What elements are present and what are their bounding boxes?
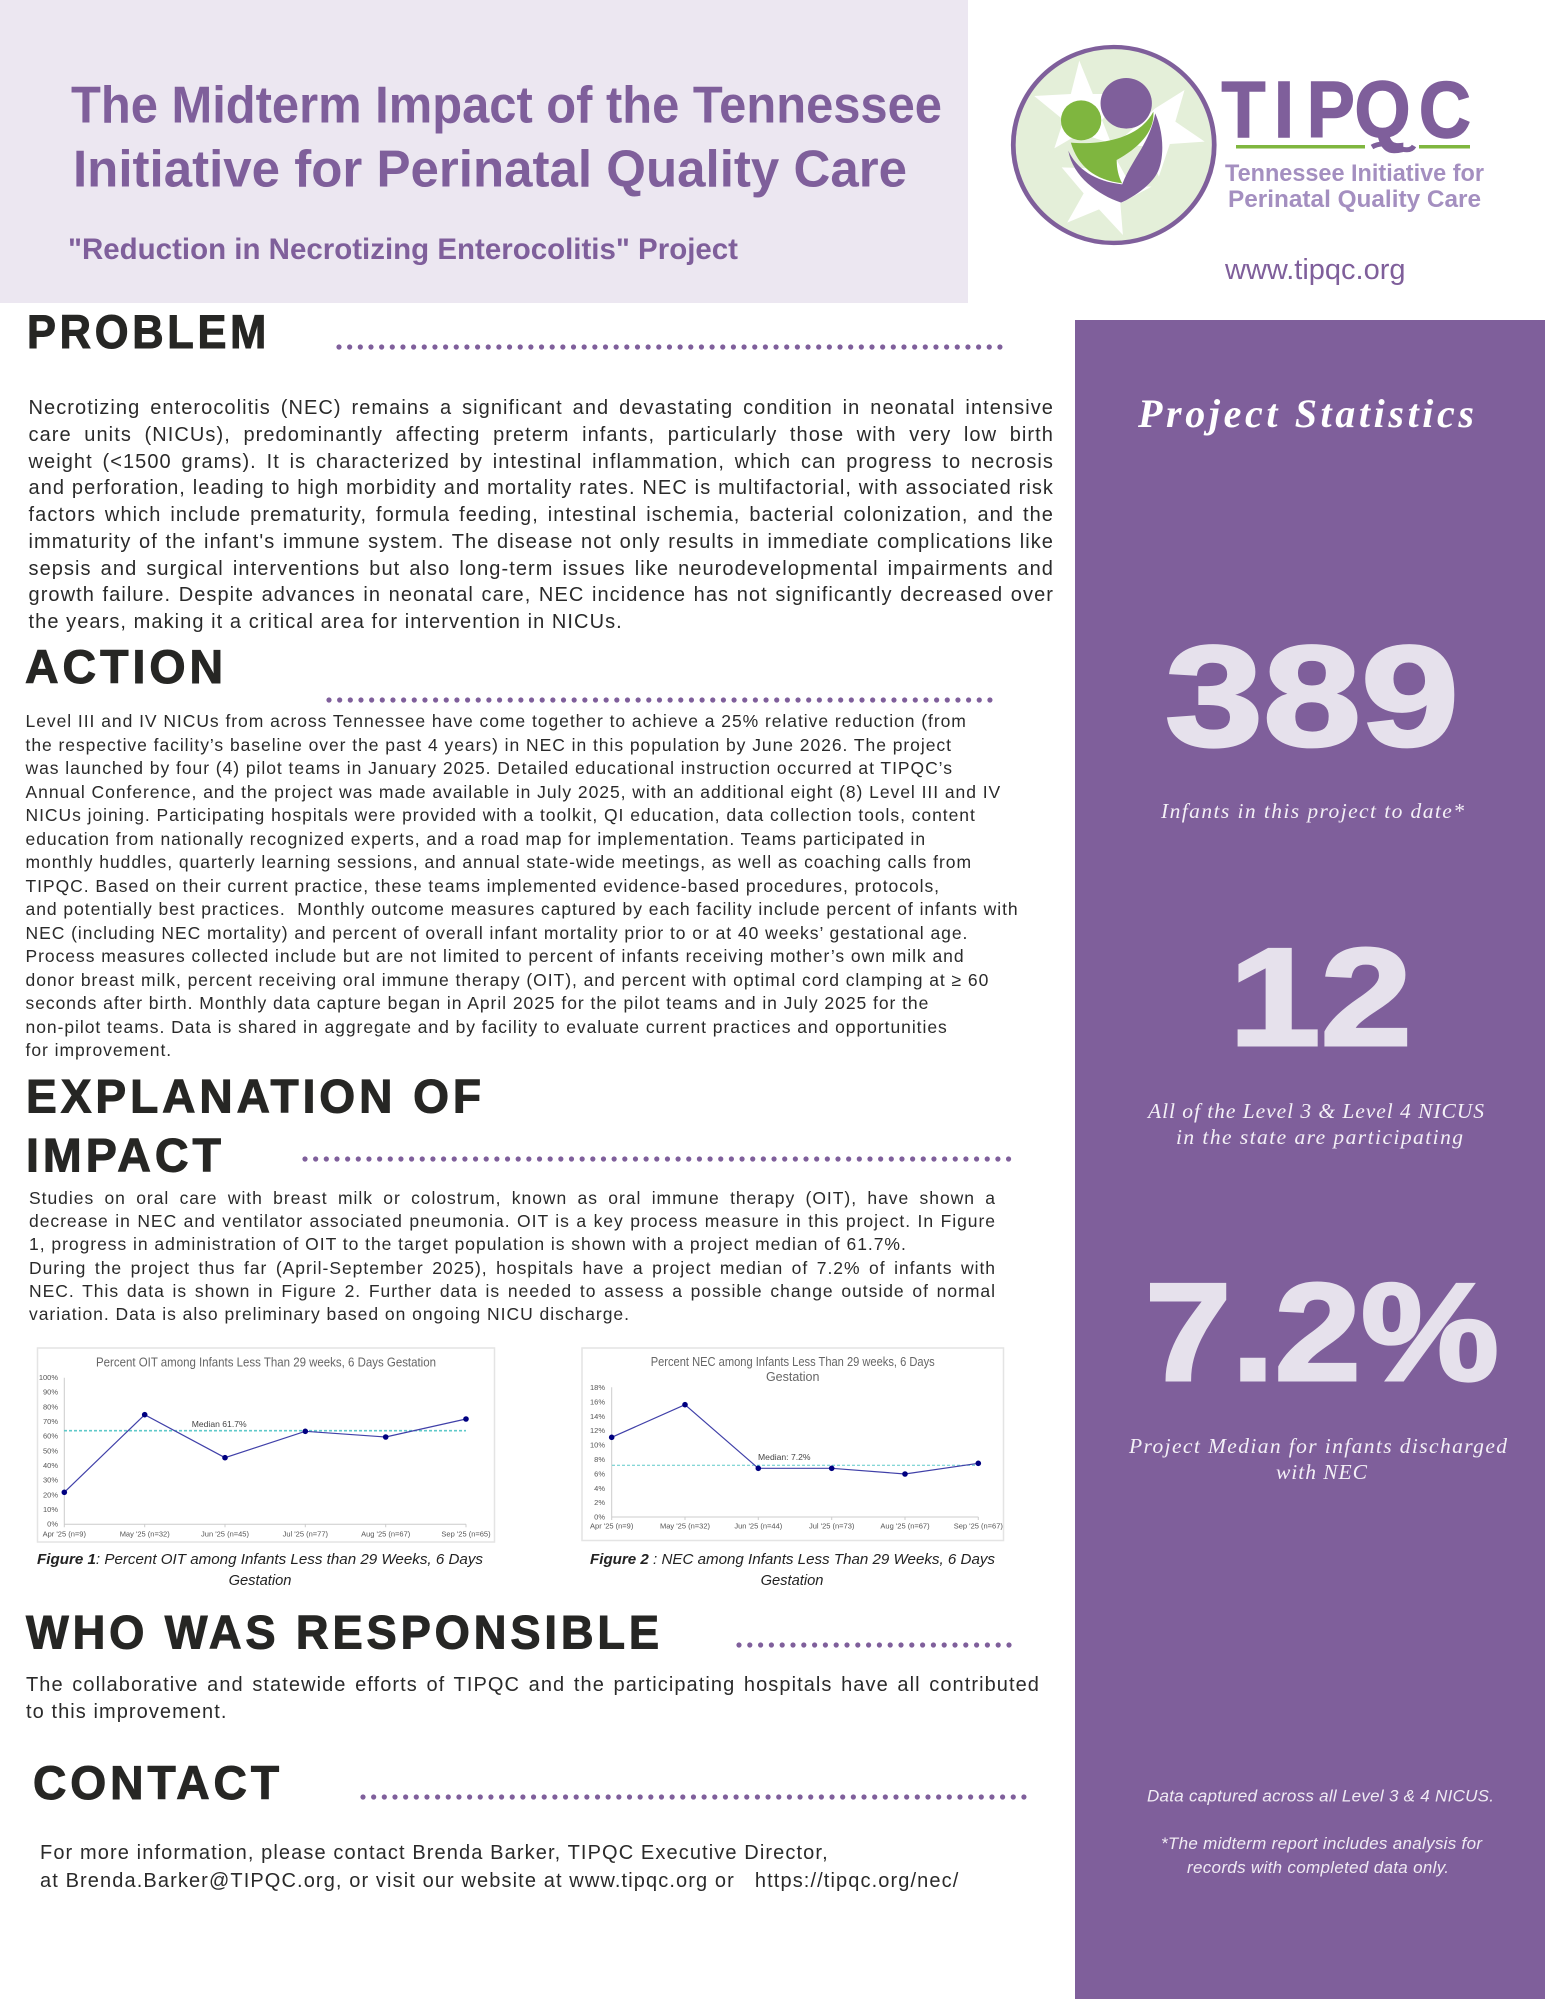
text block: explanation of impact: Studies on oral care with breast milk or colostrum, known as oral immune therapy (OIT), have shown a [29, 1188, 996, 1208]
chart: figure 2 percent NEC: 14% [590, 1412, 605, 1421]
caption: figure 2 [590, 1552, 996, 1589]
text block: action: for improvement. [26, 1040, 172, 1060]
sidebar footnotes: records with completed data only. [1187, 1858, 1449, 1877]
text block: action: NEC (including NEC mortality) and percent of overall infant mortality prior to or at 40 weeks’ gestational age. [26, 922, 968, 942]
website link: www.tipqc.org [1224, 254, 1406, 286]
text block: problem: growth failure. Despite advances in neonatal care, NEC incidence has not significantly decreased over [28, 584, 1054, 606]
chart: figure 2 percent NEC: 4% [594, 1484, 605, 1493]
chart: figure 2 percent NEC: 16% [590, 1397, 605, 1406]
text block: action [26, 711, 1019, 1060]
text block: problem: the years, making it a critical area for intervention in NICUs. [28, 611, 623, 633]
subtitle: "Reduction in Necrotizing Enterocolitis" Project [68, 233, 738, 266]
text block: problem: and perforation, leading to high morbidity and mortality rates. NEC is multifactorial, with associated risk [28, 477, 1054, 499]
stat: 12 NICUs: 12 [1229, 920, 1412, 1075]
text block: contact: For more information, please contact Brenda Barker, TIPQC Executive Director, [40, 1842, 829, 1864]
chart: figure 2 percent NEC: 12% [590, 1426, 605, 1435]
text block: explanation of impact: variation. Data is also preliminary based on ongoing NICU discharge. [29, 1304, 630, 1324]
stat: 7.2% median: 7.2% [1145, 1255, 1499, 1410]
text block: who was responsible: to this improvement. [26, 1701, 227, 1723]
text block: action: donor breast milk, percent receiving oral immune therapy (OIT), and percent with optimal cord clamping at ≥ 60 [26, 970, 989, 990]
logo tagline: Tennessee Initiative for [1225, 160, 1484, 187]
heading: explanation of impact: IMPACT [26, 1128, 225, 1182]
chart: figure 1 percent OIT: Aug '25 (n=67) [361, 1530, 411, 1538]
chart: figure 1 percent OIT: 70% [43, 1417, 58, 1426]
panel: header band [0, 0, 968, 303]
text block: problem: factors which include prematurity, formula feeding, intestinal ischemia, bacterial colonization, and the [28, 504, 1054, 526]
stat: 389 infants: 389 [1165, 618, 1459, 776]
sidebar heading: Project Statistics [1137, 391, 1474, 436]
chart: figure 1 percent OIT: 30% [43, 1476, 58, 1485]
heading: action: ACTION [25, 640, 227, 693]
chart: figure 1 percent OIT: 10% [43, 1505, 58, 1514]
title: Initiative for Perinatal Quality Care [73, 140, 907, 198]
stat: 7.2% median [1128, 1255, 1507, 1484]
stat: 12 NICUs [1146, 920, 1484, 1149]
caption: figure 1: Gestation [229, 1573, 291, 1589]
text block: problem: sepsis and surgical interventions but also long-term issues like neurodevelopmental impairments and [28, 558, 1054, 580]
text block: contact: at Brenda.Barker@TIPQC.org, or visit our website at www.tipqc.org or https://tipqc.org/nec/ [40, 1870, 959, 1892]
chart: figure 1 percent OIT: 80% [43, 1402, 58, 1411]
text block: problem [28, 397, 1054, 633]
text block: problem: Necrotizing enterocolitis (NEC) remains a significant and devastating condition in neonatal intensive [28, 397, 1054, 419]
text block: action: Annual Conference, and the project was made available in July 2025, with an additional eight (8) Level III and IV [26, 782, 1001, 802]
logo tagline: Perinatal Quality Care [1228, 186, 1481, 213]
chart: figure 1 percent OIT: Jun '25 (n=45) [201, 1530, 249, 1538]
heading: who was responsible: WHO WAS RESPONSIBLE [26, 1606, 663, 1658]
chart: figure 1 percent OIT: 100% [39, 1373, 58, 1382]
logo tagline [1225, 160, 1484, 213]
title [71, 76, 942, 198]
title: The Midterm Impact of the Tennessee [71, 76, 942, 134]
chart: figure 2 percent NEC: Apr '25 (n=9) [590, 1522, 634, 1530]
chart: figure 1 percent OIT: 50% [43, 1446, 58, 1455]
text block: explanation of impact: 1, progress in administration of OIT to the target population is shown with a project median of 61.7%. [29, 1234, 907, 1254]
chart: figure 2 percent NEC: 0% [594, 1513, 605, 1522]
chart: figure 1 percent OIT: 40% [43, 1461, 58, 1470]
caption: figure 1: Figure 1: Percent OIT among Infants Less than 29 Weeks, 6 Days [37, 1552, 484, 1568]
chart: figure 2 percent NEC: 18% [590, 1383, 605, 1392]
chart: figure 1 percent OIT: Jul '25 (n=77) [283, 1530, 329, 1538]
text block: who was responsible: The collaborative and statewide efforts of TIPQC and the participating hospitals have all contributed [26, 1674, 1040, 1696]
text block: problem: weight (<1500 grams). It is characterized by intestinal inflammation, which can progress to necrosis [28, 450, 1054, 472]
text block: explanation of impact: decrease in NEC and ventilator associated pneumonia. OIT is a key process measure in this project. In Figure [29, 1211, 996, 1231]
text block: explanation of impact: During the project thus far (April-September 2025), hospitals have a project median of 7.2% of infants with [29, 1258, 996, 1278]
heading: explanation of impact: EXPLANATION OF [26, 1070, 485, 1122]
stat: 389 infants: Infants in this project to date* [1160, 799, 1464, 823]
chart: figure 1 percent OIT: 0% [47, 1520, 58, 1529]
chart: figure 2 percent NEC: 6% [594, 1469, 605, 1478]
chart: figure 2 percent NEC: Jun '25 (n=44) [734, 1522, 783, 1530]
text block: problem: care units (NICUs), predominantly affecting preterm infants, particularly those with very low birth [28, 424, 1054, 446]
chart: figure 2 percent NEC: 2% [594, 1498, 605, 1507]
panel: project statistics sidebar [1075, 320, 1545, 1999]
text block: contact [40, 1842, 959, 1892]
sidebar footnotes: *The midterm report includes analysis for [1161, 1834, 1483, 1853]
icon: wordmark underline [1236, 144, 1470, 150]
stat: 7.2% median: Project Median for infants discharged [1128, 1434, 1507, 1458]
caption: figure 2: Gestation [761, 1573, 823, 1589]
chart: figure 2 percent NEC: Aug '25 (n=67) [880, 1522, 930, 1530]
chart: figure 1 percent OIT: May '25 (n=32) [120, 1530, 170, 1538]
chart: figure 1 percent OIT: 90% [43, 1388, 58, 1397]
sidebar footnotes [1147, 1786, 1494, 1877]
stat: 12 NICUs: All of the Level 3 & Level 4 NICUS [1146, 1099, 1484, 1123]
text block: action: monthly huddles, quarterly learning sessions, and annual state-wide meetings, as well as coaching calls from [26, 852, 972, 872]
chart: figure 1 percent OIT [38, 1348, 494, 1542]
text block: action: was launched by four (4) pilot teams in January 2025. Detailed educational instruction occurred at TIPQC’s [26, 758, 953, 778]
chart: figure 2 percent NEC: Percent NEC among Infants Less Than 29 weeks, 6 Days [651, 1355, 935, 1369]
chart: figure 2 percent NEC: May '25 (n=32) [660, 1522, 711, 1530]
heading: contact: CONTACT [33, 1756, 283, 1809]
text block: action: the respective facility’s baseline over the past 4 years) in NEC in this population by June 2026. The project [26, 734, 952, 754]
caption: figure 2: Figure 2 : NEC among Infants Less Than 29 Weeks, 6 Days [590, 1552, 996, 1568]
chart: figure 2 percent NEC: Median: 7.2% [758, 1452, 811, 1462]
chart: figure 2 percent NEC: Sep '25 (n=67) [954, 1522, 1003, 1530]
stat: 389 infants [1160, 618, 1464, 823]
sidebar footnotes: Data captured across all Level 3 & 4 NICUS. [1147, 1786, 1494, 1806]
text block: action: and potentially best practices. Monthly outcome measures captured by each facility include percent of infants with [26, 899, 1019, 919]
icon: logo emblem [1013, 47, 1214, 243]
text block: action: seconds after birth. Monthly data capture began in April 2025 for the pilot teams and in July 2025 for the [26, 993, 929, 1013]
caption: figure 1 [37, 1552, 484, 1589]
chart: figure 1 percent OIT: Apr '25 (n=9) [43, 1530, 86, 1538]
text block: action: education from nationally recognized experts, and a road map for implementation. Teams participated in [26, 828, 926, 848]
logo: TIPQC [1013, 47, 1484, 243]
chart: figure 2 percent NEC: 10% [590, 1441, 605, 1450]
chart: figure 1 percent OIT: 20% [43, 1490, 58, 1499]
stat: 7.2% median: with NEC [1276, 1460, 1368, 1484]
chart: figure 2 percent NEC: Jul '25 (n=73) [809, 1522, 855, 1530]
text block: action: TIPQC. Based on their current practice, these teams implemented evidence-based procedures, protocols, [26, 876, 940, 896]
chart: figure 1 percent OIT: Median 61.7% [192, 1419, 247, 1429]
chart: figure 1 percent OIT: Sep '25 (n=65) [441, 1530, 491, 1538]
text block: action: NICUs joining. Participating hospitals were provided with a toolkit, QI education, data collection tools, content [26, 805, 976, 825]
chart: figure 1 percent OIT: 60% [43, 1432, 58, 1441]
text block: problem: immaturity of the infant's immune system. The disease not only results in immediate complications like [28, 531, 1054, 553]
text block: explanation of impact [29, 1188, 996, 1324]
logo wordmark: TIPQC [1221, 66, 1471, 155]
text block: explanation of impact: NEC. This data is shown in Figure 2. Further data is needed to assess a possible change outside of normal [29, 1281, 996, 1301]
chart: figure 2 percent NEC [582, 1348, 1004, 1540]
text block: action: non-pilot teams. Data is shared in aggregate and by facility to evaluate current practices and opportunities [26, 1016, 948, 1036]
text block: who was responsible [26, 1674, 1040, 1723]
text block: action: Level III and IV NICUs from across Tennessee have come together to achieve a 25% relative reduction (from [26, 711, 967, 731]
text block: action: Process measures collected include but are not limited to percent of infants receiving mother’s own milk and [26, 946, 965, 966]
heading: problem: PROBLEM [27, 305, 270, 358]
stat: 12 NICUs: in the state are participating [1176, 1125, 1463, 1149]
chart: figure 1 percent OIT: Percent OIT among Infants Less Than 29 weeks, 6 Days Gestation [96, 1356, 436, 1370]
chart: figure 2 percent NEC: Gestation [766, 1370, 819, 1384]
chart: figure 2 percent NEC: 8% [594, 1455, 605, 1464]
heading: explanation of impact [26, 1070, 485, 1182]
